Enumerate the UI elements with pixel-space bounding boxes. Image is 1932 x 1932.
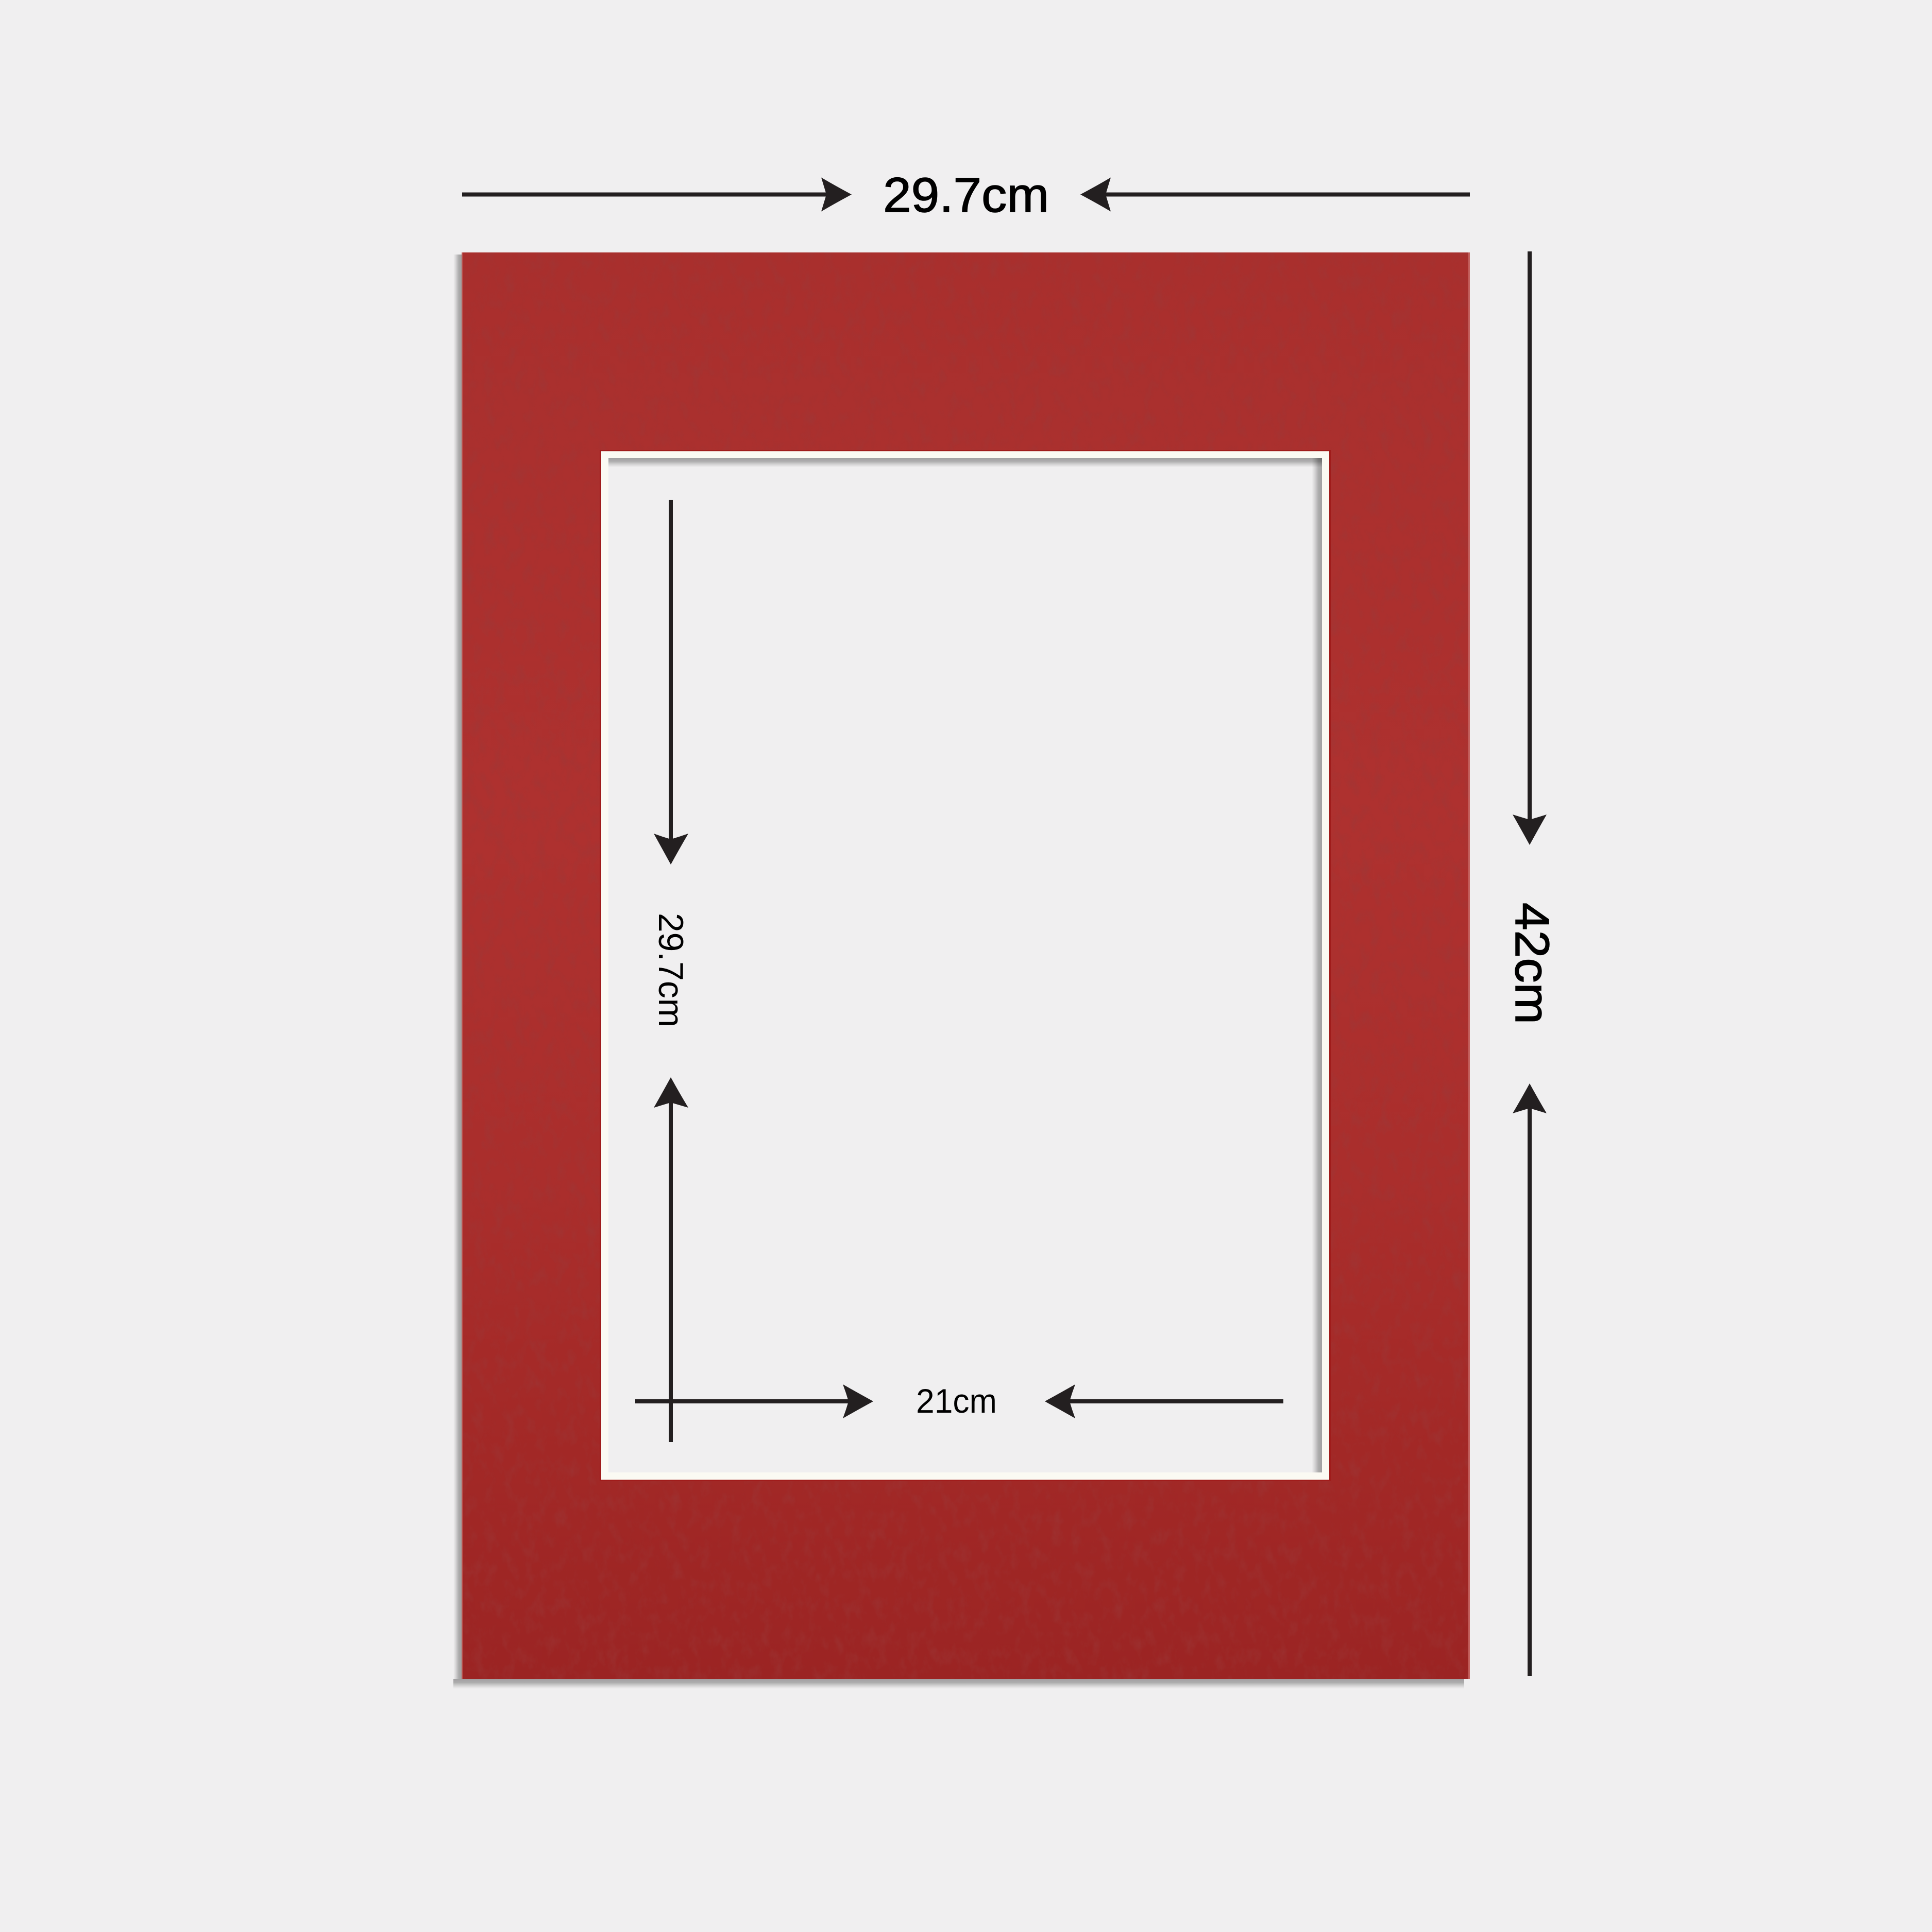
label: outer height 42cm: 42cm: [1505, 903, 1559, 1024]
window opening with white bevel: [600, 450, 1331, 1481]
arrow: inner width right: [1045, 1384, 1283, 1418]
arrow: outer width right: [1080, 177, 1470, 211]
mount board panel: [453, 252, 1470, 1689]
arrow: outer width left: [462, 177, 852, 211]
arrow: outer height bottom: [1513, 1083, 1547, 1676]
label: inner height 29.7cm: 29.7cm: [651, 913, 690, 1027]
arrow: outer height top: [1513, 251, 1547, 845]
label: outer width 29.7cm: 29.7cm: [883, 168, 1049, 223]
arrow: inner height bottom: [654, 1077, 688, 1442]
label: inner width 21cm: 21cm: [916, 1382, 997, 1420]
arrow: inner width left: [635, 1384, 873, 1418]
arrow: inner height top: [654, 500, 688, 865]
